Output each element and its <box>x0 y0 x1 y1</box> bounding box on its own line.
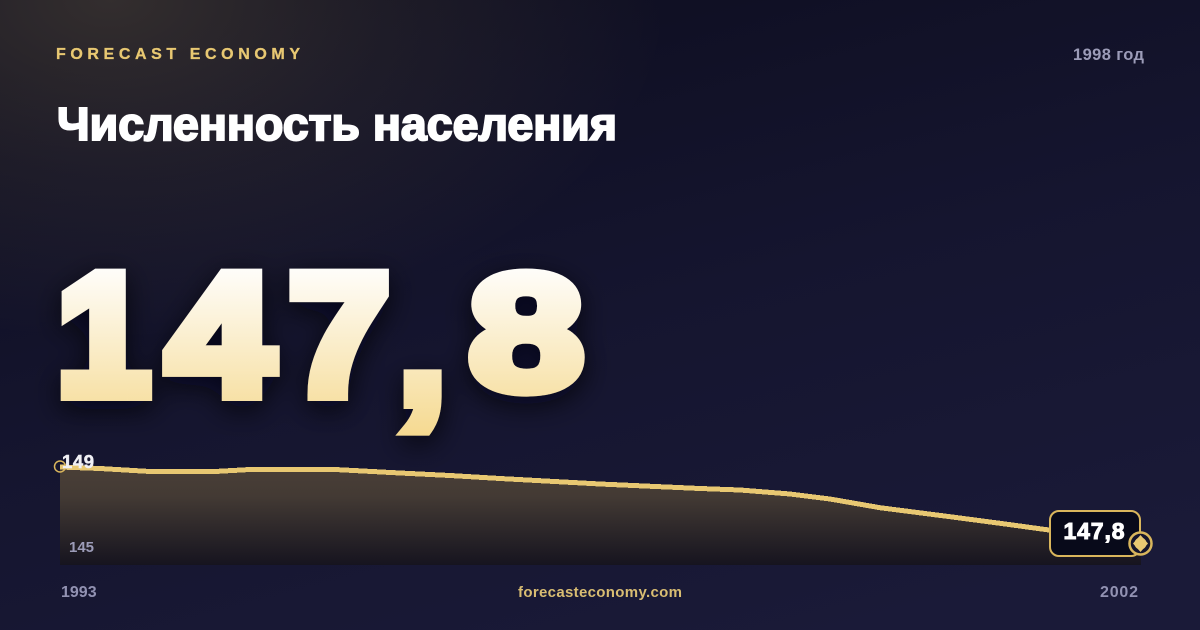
big value: 1 <box>57 239 150 431</box>
chart line <box>60 467 1141 544</box>
big value: , <box>399 247 446 439</box>
big value <box>57 239 584 439</box>
title: Численность населения <box>57 98 617 150</box>
x axis start year: 1993 <box>61 584 97 601</box>
year label: 1998 год <box>1073 46 1145 64</box>
x axis end year: 2002 <box>1100 584 1138 601</box>
start marker <box>54 461 66 472</box>
big value: 8 <box>469 241 584 424</box>
website: forecasteconomy.com <box>518 584 682 601</box>
end value badge: 147,8 <box>1064 518 1125 544</box>
min label: 145 <box>69 539 94 556</box>
end marker <box>1130 532 1152 554</box>
area chart <box>54 451 1152 565</box>
big value: 7 <box>289 239 390 431</box>
chart area fill <box>60 467 1141 565</box>
end value badge <box>1050 511 1140 556</box>
big value: 4 <box>167 239 273 431</box>
brand label: FORECAST ECONOMY <box>56 46 300 63</box>
max label: 149 <box>62 451 94 472</box>
